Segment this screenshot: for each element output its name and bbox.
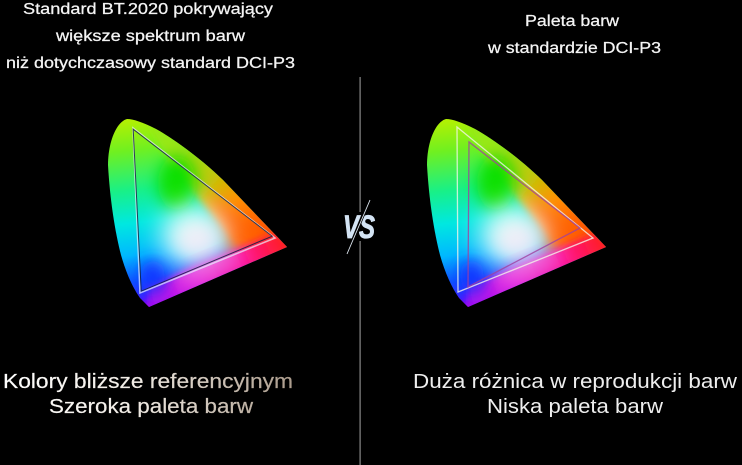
right heading: Paleta barw [525, 13, 620, 30]
right caption [413, 371, 738, 418]
VS badge [342, 200, 378, 254]
VS letters: VS [343, 209, 375, 245]
left chromaticity diagram [100, 110, 295, 315]
right chromaticity diagram [419, 110, 614, 315]
left caption: Szeroka paleta barw [49, 396, 254, 418]
right caption: Duża różnica w reprodukcji barw [413, 371, 738, 393]
left caption: Kolory bliższe referencyjnym [3, 371, 293, 393]
right caption: Niska paleta barw [487, 396, 664, 418]
right heading [487, 13, 661, 57]
left heading [6, 1, 295, 72]
left heading: większe spektrum barw [55, 28, 246, 45]
left heading: Standard BT.2020 pokrywający [23, 1, 273, 18]
inner DCI-P3 triangle [468, 142, 580, 287]
slash [347, 200, 370, 254]
outer BT.2020 reference triangle [457, 127, 593, 292]
left caption [3, 371, 293, 418]
BT.2020 triangle outline [133, 128, 275, 293]
center divider line [360, 77, 361, 465]
left heading: niż dotychczasowy standard DCI-P3 [6, 55, 295, 72]
right heading: w standardzie DCI-P3 [487, 40, 661, 57]
